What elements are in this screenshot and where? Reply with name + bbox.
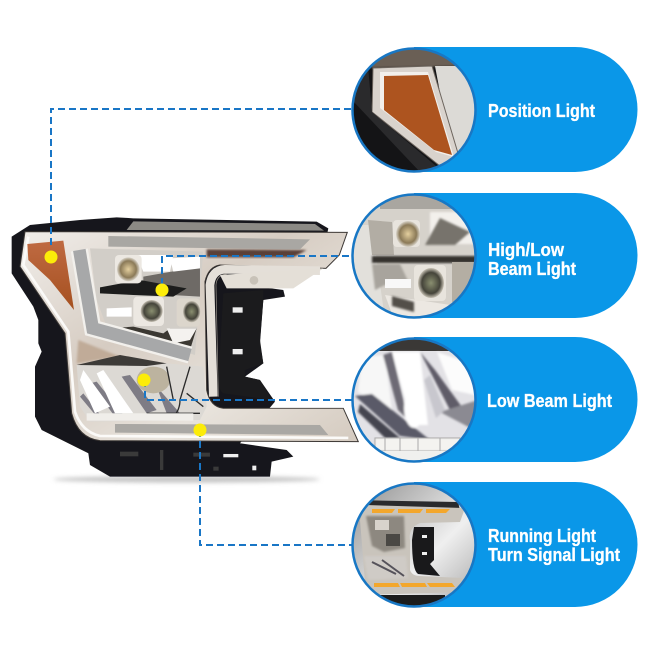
label [488,240,576,279]
top DRL strip [108,236,310,249]
pill background [414,337,638,462]
label: Running Light [488,526,596,546]
inner chrome trim highlight [23,237,348,438]
marker dot: low beam [138,374,150,386]
marker dot: high/low beam [156,284,168,296]
panel: high/low beam light [350,190,638,322]
panel: position light [350,45,638,175]
pill background [414,47,638,172]
thumbnail: amber lens [354,50,474,170]
label: Low Beam Light [487,391,612,411]
thumbnail ring [352,338,476,462]
ground shadow [53,476,320,483]
label [488,526,620,565]
lower low-beam cavity [77,355,207,422]
panel: running and turn signal light [350,480,638,610]
bottom mount [120,450,256,471]
label: Turn Signal Light [488,545,620,565]
DRL grey tube [79,250,190,355]
thumbnail: reflector facets [354,340,474,460]
label: Position Light [488,101,595,121]
upper projector cavity [90,248,203,355]
thumbnail ring [352,48,476,172]
black housing [12,217,328,477]
headlight illustration [12,217,358,483]
leader line: low beam [145,380,352,400]
thumbnail ring [352,484,476,606]
pill background [414,482,638,607]
thumbnail ring [352,194,476,318]
thumbnail: lit amber strips [354,484,474,606]
chrome lens body [20,232,358,442]
bottom DRL strip [115,424,328,435]
DRL grey tube core [79,250,190,355]
marker dot: running light [194,424,206,436]
pill background [414,193,638,318]
marker dot: position light [44,250,58,264]
tan band on lower left [77,340,120,363]
top window band [127,221,324,231]
thumbnail: projectors [354,196,474,316]
label: Beam Light [488,259,576,279]
leader line: position light [51,109,352,245]
black mounting bracket [210,268,323,400]
amber position lens [27,241,74,310]
panel: low beam light [350,335,638,465]
label: High/Low [488,240,565,260]
leader line: high/low beam [162,256,352,285]
dark reflection under top bar [207,249,307,257]
leader line: running light [200,430,352,545]
